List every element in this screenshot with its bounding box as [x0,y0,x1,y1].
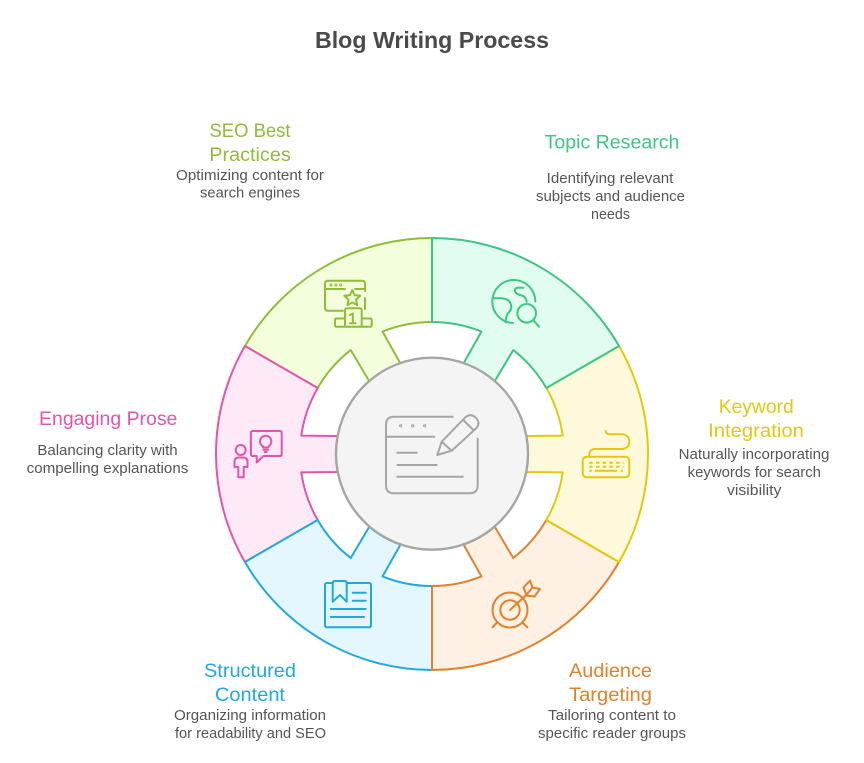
heading: topic research: Topic Research [545,132,679,154]
description: SEO best practices: search engines [200,185,300,202]
description: topic research: needs [591,206,630,223]
description: keyword integration: keywords for search [688,464,821,481]
description: audience targeting [538,707,686,742]
heading: keyword integration [708,396,804,442]
heading: keyword integration: Integration [708,420,804,442]
panel: structured content [174,520,432,742]
heading: audience targeting: Targeting [569,684,652,706]
icon: target with arrow [492,580,540,628]
panel: topic research [432,132,685,388]
description: SEO best practices [176,167,324,202]
description: structured content: for readability and SEO [175,725,326,742]
center hub [336,358,528,550]
heading: structured content: Structured [204,660,296,682]
heading: engaging prose: Engaging Prose [39,408,177,430]
segment: topic research [432,238,619,388]
panel: engaging prose [27,325,375,562]
description: engaging prose [27,442,188,477]
panel: keyword integration [489,346,829,583]
description: SEO best practices: Optimizing content for [176,167,324,184]
icon: person with idea bubble [234,431,282,477]
heading: SEO best practices: SEO Best [210,120,291,142]
description: keyword integration: visibility [727,482,782,499]
panel: SEO best practices [176,120,468,421]
description: audience targeting: Tailoring content to [548,707,676,724]
segment: engaging prose [151,325,375,562]
panel: audience targeting [396,487,686,742]
heading: SEO best practices: Practices [209,144,291,166]
segment: structured content [245,520,432,670]
heading: audience targeting [569,660,652,706]
description: topic research [536,170,685,223]
icon: book with bookmark [325,581,371,627]
hub circle [336,358,528,550]
icon: webpage with star and podium [325,281,372,327]
heading: structured content [204,660,296,706]
description: topic research: subjects and audience [536,188,685,205]
segment: SEO best practices [245,184,468,421]
icon: keyboard [583,431,629,477]
icon: document with pencil [386,415,478,493]
heading: structured content: Content [215,684,286,706]
description: structured content [174,707,326,742]
segment: audience targeting [396,487,619,724]
description: engaging prose: compelling explanations [27,460,188,477]
description: keyword integration [679,446,829,499]
description: topic research: Identifying relevant [547,170,674,187]
heading: keyword integration: Keyword [719,396,794,418]
icon: globe with magnifier [492,280,539,327]
heading: audience targeting: Audience [569,660,652,682]
description: audience targeting: specific reader groups [538,725,686,742]
description: structured content: Organizing information [174,707,326,724]
segment: keyword integration [489,346,713,583]
heading: SEO best practices [209,120,291,166]
title: Blog Writing Process [315,27,549,53]
description: keyword integration: Naturally incorporating [679,446,829,463]
description: engaging prose: Balancing clarity with [37,442,178,459]
